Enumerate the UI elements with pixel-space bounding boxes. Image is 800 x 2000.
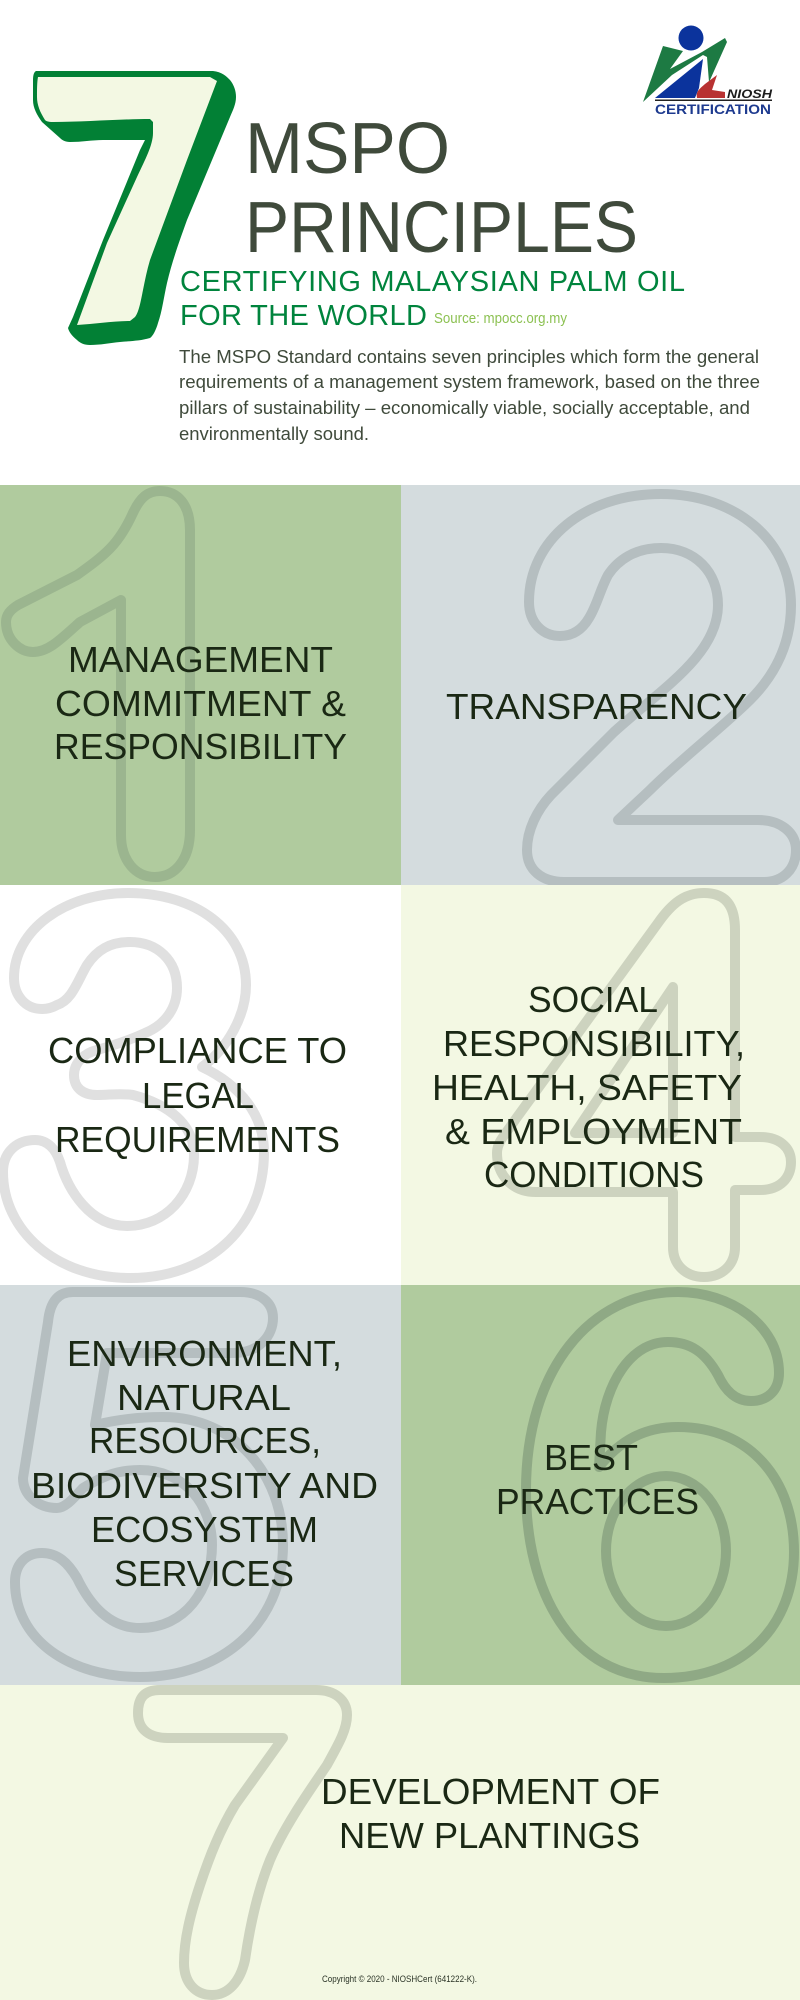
logo: NIOSH Certification: NIOSH	[727, 87, 772, 101]
panel: principle 4	[401, 885, 800, 1285]
panel: principle 6: BEST	[544, 1437, 638, 1478]
panel: principle 3: LEGAL	[142, 1075, 254, 1116]
panel: principle 6: PRACTICES	[496, 1481, 699, 1522]
panel: principle 5: ENVIRONMENT,	[67, 1333, 342, 1374]
main title	[245, 109, 638, 268]
panel: principle 7: NEW PLANTINGS	[339, 1815, 640, 1856]
panel: principle 2	[401, 485, 800, 885]
panel: principle 1	[0, 485, 401, 885]
panel: principle 5: SERVICES	[114, 1553, 294, 1594]
panel: principle 5: RESOURCES,	[89, 1420, 321, 1461]
intro paragraph	[179, 346, 760, 444]
panel: principle 1: MANAGEMENT	[68, 639, 333, 680]
panel: principle 4: & EMPLOYMENT	[445, 1111, 742, 1152]
panel: principle 3	[0, 885, 401, 1285]
intro paragraph: environmentally sound.	[179, 423, 369, 444]
panel: principle 5: ECOSYSTEM	[91, 1509, 318, 1550]
header big numeral 7	[33, 71, 236, 345]
logo: NIOSH Certification: CERTIFICATION	[655, 102, 771, 117]
panel: principle 4: CONDITIONS	[484, 1154, 704, 1195]
intro paragraph: The MSPO Standard contains seven principles which form the general	[179, 346, 759, 367]
main title: MSPO	[245, 109, 450, 189]
panel: principle 4: RESPONSIBILITY,	[443, 1023, 745, 1064]
panel: principle 7	[0, 1685, 800, 2000]
subtitle	[180, 266, 685, 332]
subtitle: CERTIFYING MALAYSIAN PALM OIL	[180, 266, 685, 298]
intro paragraph: pillars of sustainability – economically viable, socially acceptable, and	[179, 397, 750, 418]
panel: principle 1: RESPONSIBILITY	[54, 726, 347, 767]
panel: principle 4: SOCIAL	[528, 979, 658, 1020]
panel: principle 2: TRANSPARENCY	[446, 686, 747, 727]
panel: principle 6	[401, 1285, 800, 1685]
panel: principle 4: HEALTH, SAFETY	[432, 1067, 742, 1108]
copyright footer: Copyright © 2020 - NIOSHCert (641222-K).	[322, 1974, 477, 1985]
panel: principle 5: NATURAL	[117, 1377, 291, 1418]
main title: PRINCIPLES	[245, 188, 638, 268]
panel: principle 5: BIODIVERSITY AND	[31, 1465, 378, 1506]
panel: principle 3: COMPLIANCE TO	[48, 1030, 347, 1071]
panel: principle 7: DEVELOPMENT OF	[321, 1771, 660, 1812]
subtitle: FOR THE WORLD	[180, 300, 427, 332]
intro paragraph: requirements of a management system framework, based on the three	[179, 371, 760, 392]
panel: principle 1: COMMITMENT &	[55, 683, 346, 724]
panel: principle 5	[0, 1285, 401, 1685]
source note: Source: mpocc.org.my	[434, 310, 567, 327]
logo: NIOSH Certification	[643, 26, 772, 117]
panel: principle 3: REQUIREMENTS	[55, 1119, 340, 1160]
